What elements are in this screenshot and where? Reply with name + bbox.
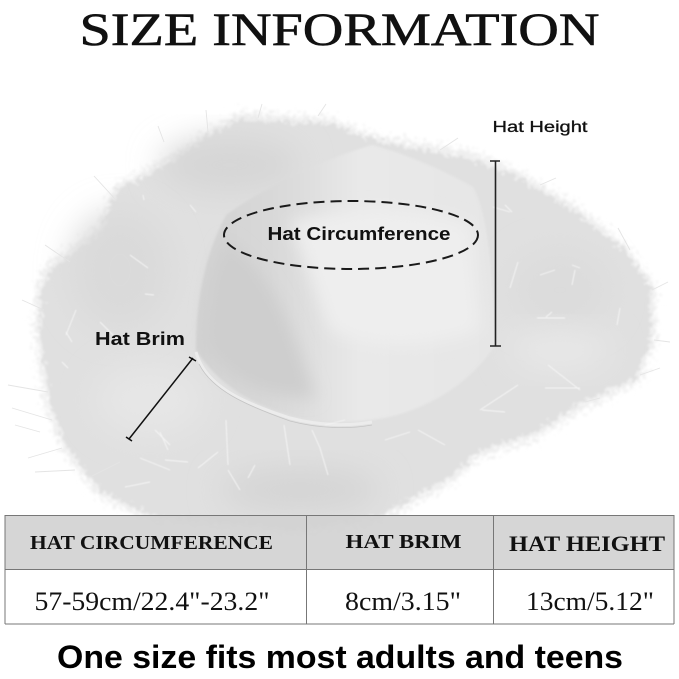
measure: hat brim	[95, 329, 196, 441]
brim label: Hat Brim	[95, 329, 185, 349]
hat brim outer wisps	[34, 112, 656, 536]
crown shadow	[205, 240, 315, 398]
brim arrow	[126, 357, 196, 441]
header: hat brim: HAT BRIM	[346, 531, 462, 553]
value: brim: 8cm/3.15"	[345, 587, 461, 616]
circumference label: Hat Circumference	[268, 223, 450, 244]
wispy fur ends	[8, 104, 670, 476]
fur shading	[70, 137, 610, 512]
value: height: 13cm/5.12"	[526, 587, 654, 616]
fur strands	[62, 195, 620, 490]
table body	[5, 569, 674, 624]
footer note: One size fits most adults and teens	[57, 639, 623, 675]
table grid	[5, 515, 674, 624]
measure: hat height	[490, 119, 588, 346]
height arrow	[490, 161, 501, 346]
size table	[5, 515, 674, 624]
table header band	[5, 515, 674, 569]
measure: hat circumference	[224, 201, 478, 269]
hat band cord	[196, 352, 372, 425]
height label: Hat Height	[492, 119, 588, 136]
hat brim fur	[40, 120, 650, 530]
header: hat height: HAT HEIGHT	[509, 531, 665, 556]
value: circumference: 57-59cm/22.4"-23.2"	[34, 587, 270, 616]
hat crown	[196, 145, 495, 422]
crown highlight	[290, 210, 480, 345]
dashed ellipse	[224, 201, 478, 269]
hat illustration	[8, 104, 670, 536]
title: SIZE INFORMATION	[80, 4, 600, 56]
header: hat circumference: HAT CIRCUMFERENCE	[30, 532, 273, 554]
